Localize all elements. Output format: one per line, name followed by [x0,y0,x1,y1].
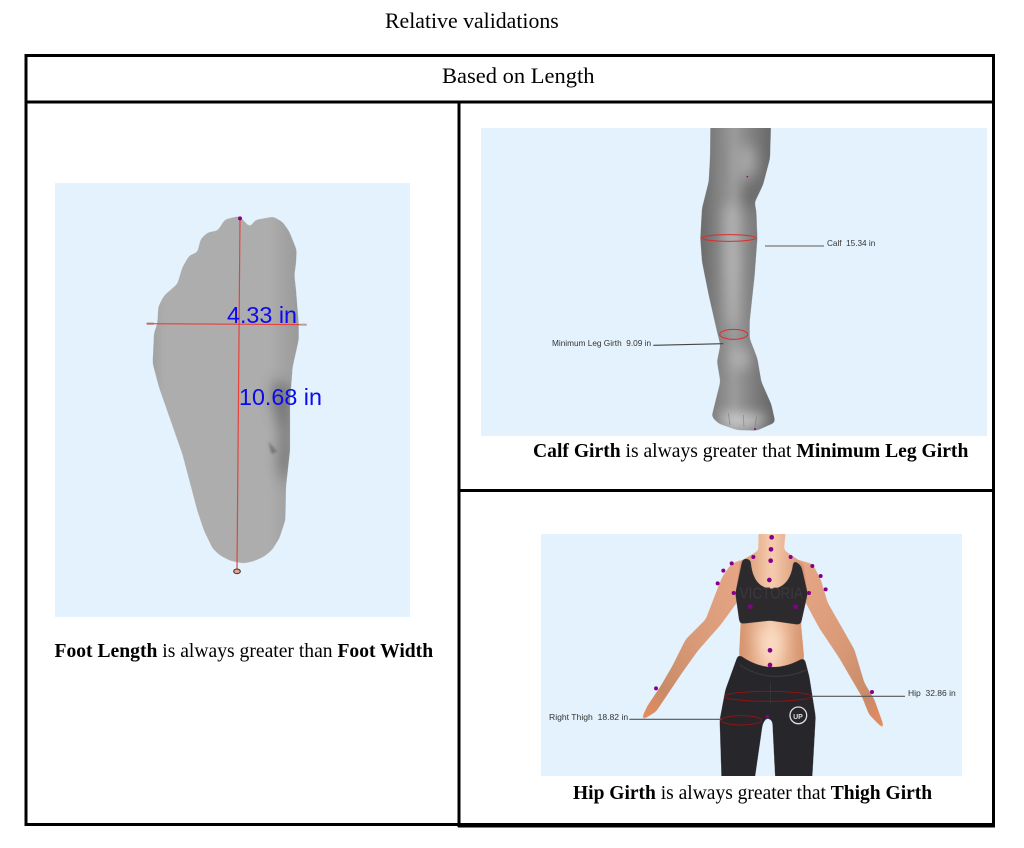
heading: based on length: Based on Length [442,63,594,88]
calf image background [481,128,987,436]
icon: body scan: VICTORIA [740,585,804,602]
icon: body scan [629,534,905,776]
logo text on leggings: UP [793,714,803,721]
title: Relative validations [385,9,559,33]
icon: foot scan [147,216,307,574]
panel: calf [481,112,987,462]
right thigh label: Right Thigh 18.82 in [549,712,628,722]
caption: hip: Hip Girth is always greater that Thigh Girth [573,783,932,804]
panel: hip [541,520,962,804]
caption: foot: Foot Length is always greater than Foot Width [54,641,433,662]
minimum leg girth label: Minimum Leg Girth 9.09 in [552,339,651,348]
foot width label: 4.33 in [227,302,297,328]
panel: foot [54,183,433,662]
caption: calf: Calf Girth is always greater that Minimum Leg Girth [533,441,968,462]
hip image background [541,534,962,776]
icon: leg scan [653,112,824,431]
foot length label: 10.68 in [239,384,322,410]
calf label: Calf 15.34 in [827,239,876,248]
hip label: Hip 32.86 in [908,688,956,698]
foot image background [55,183,410,617]
